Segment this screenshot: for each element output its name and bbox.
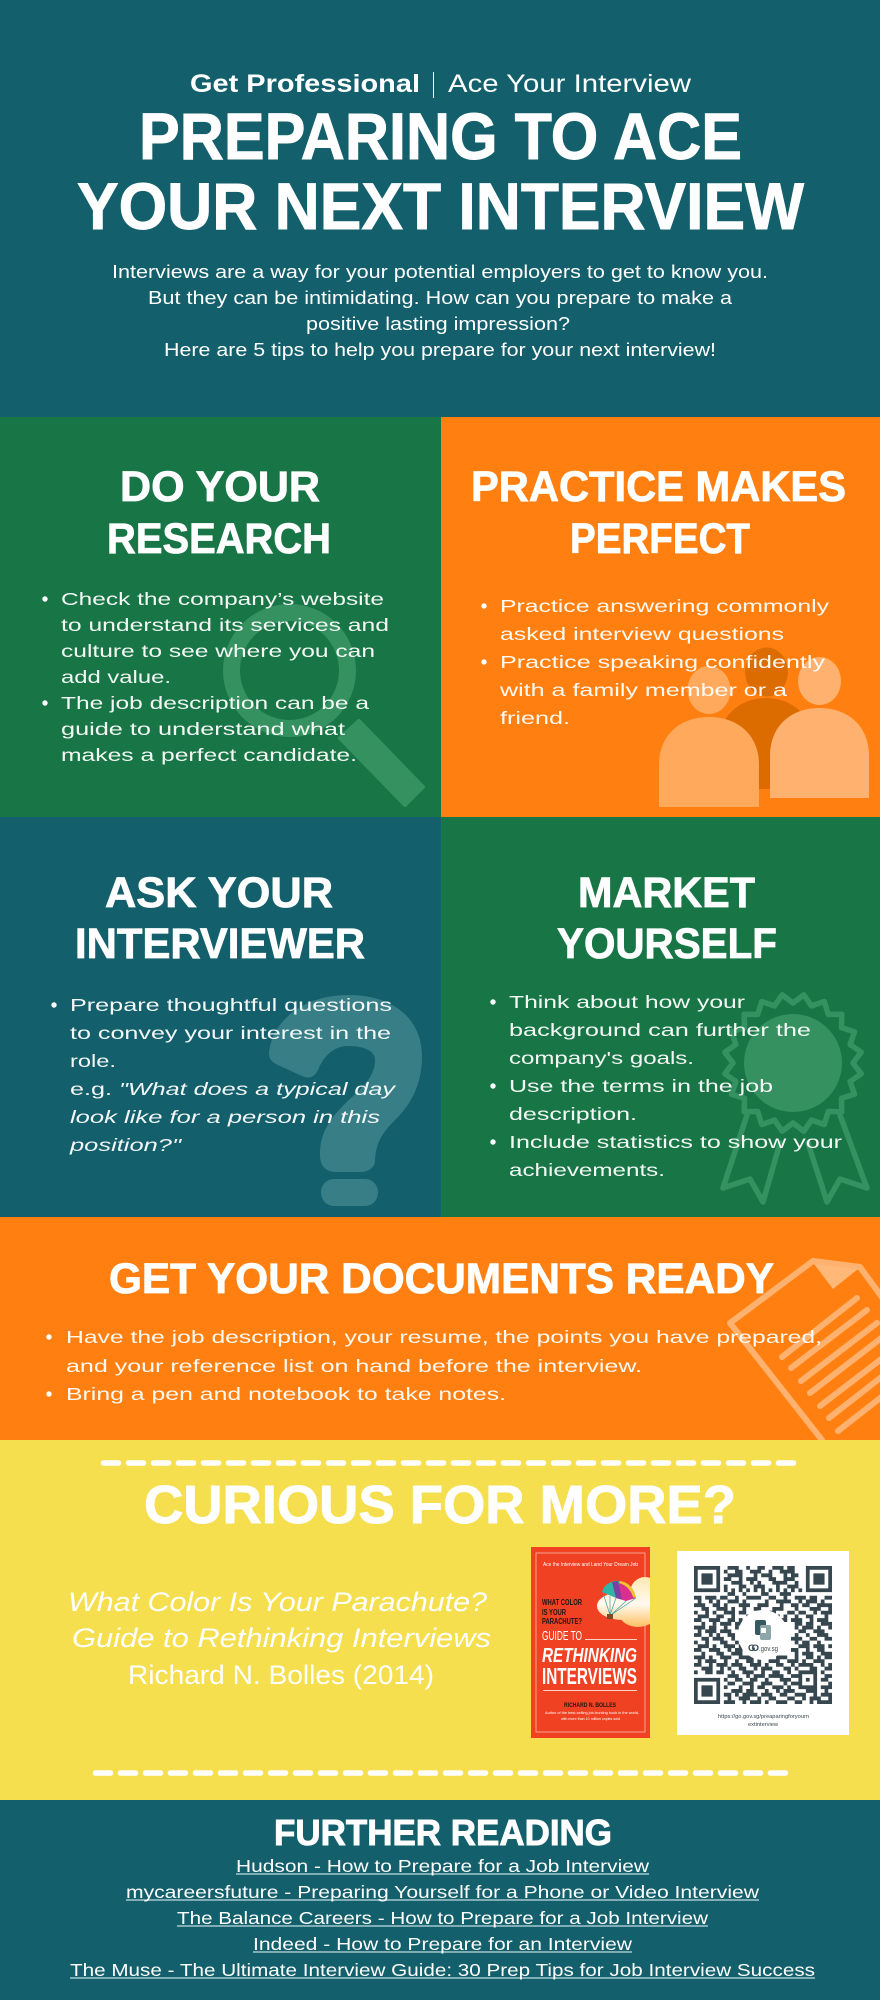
book cover: PARACHUTE? bbox=[542, 1617, 582, 1626]
icon: three people bbox=[659, 648, 869, 807]
heading: CURIOUS FOR MORE? bbox=[144, 1475, 736, 1535]
dashed divider top bbox=[104, 1460, 796, 1466]
icon: magnifying glass bbox=[232, 612, 423, 805]
book cover: INTERVIEWS bbox=[542, 1663, 637, 1689]
dashed divider bottom bbox=[96, 1770, 787, 1776]
subtitle bbox=[190, 70, 692, 98]
heading bbox=[471, 463, 846, 563]
bullet list: Practice speaking confidently bbox=[500, 652, 825, 672]
bullet list bbox=[46, 1327, 822, 1404]
book citation: What Color Is Your Parachute? bbox=[68, 1587, 487, 1617]
heading: INTERVIEWER bbox=[75, 920, 365, 968]
book cover: with more than 10 million copies sold bbox=[561, 1717, 620, 1721]
bullet list: with a family member or a bbox=[499, 680, 787, 700]
bullet list: Bring a pen and notebook to take notes. bbox=[66, 1384, 506, 1404]
bullet list bbox=[51, 995, 397, 1155]
reading links bbox=[70, 1856, 815, 1980]
subtitle: Get Professional bbox=[190, 70, 420, 98]
reading links: The Muse - The Ultimate Interview Guide: 30 Prep Tips for Job Interview Success bbox=[70, 1960, 815, 1980]
book cover: Author of the best-selling job-hunting book in the world, bbox=[545, 1711, 639, 1715]
bullet list: Practice answering commonly bbox=[500, 596, 829, 616]
intro text bbox=[112, 262, 768, 360]
heading: DO YOUR bbox=[120, 463, 320, 511]
QR logo: .gov.sg bbox=[759, 1646, 778, 1653]
book cover: GUIDE TO bbox=[542, 1628, 582, 1643]
QR logo bbox=[738, 1610, 788, 1660]
bullet list: guide to understand what bbox=[61, 719, 345, 739]
icon: document bbox=[730, 1261, 880, 1440]
reading links: Hudson - How to Prepare for a Job Interview bbox=[236, 1856, 649, 1876]
book citation: Guide to Rethinking Interviews bbox=[72, 1623, 491, 1653]
bullet list: to convey your interest in the bbox=[70, 1023, 391, 1043]
book citation: Richard N. Bolles (2014) bbox=[128, 1660, 434, 1690]
heading bbox=[75, 869, 365, 968]
heading bbox=[107, 463, 331, 563]
heading: YOURSELF bbox=[557, 920, 777, 968]
intro text: But they can be intimidating. How can you prepare to make a bbox=[148, 288, 733, 308]
bullet list: Prepare thoughtful questions bbox=[70, 995, 392, 1015]
QR logo: GO bbox=[748, 1643, 759, 1654]
bullet list: company's goals. bbox=[509, 1048, 694, 1068]
panel: further reading bbox=[0, 1800, 880, 2000]
heading bbox=[557, 869, 777, 968]
bullet list: makes a perfect candidate. bbox=[61, 745, 357, 765]
bullet list: description. bbox=[509, 1104, 637, 1124]
book cover: RICHARD N. BOLLES bbox=[564, 1702, 617, 1709]
bullet list: friend. bbox=[500, 708, 570, 728]
panel: market yourself bbox=[441, 817, 880, 1217]
title: PREPARING TO ACE bbox=[139, 99, 742, 173]
bullet list bbox=[481, 596, 829, 728]
QR url: extinterview bbox=[748, 1722, 778, 1728]
bullet list: culture to see where you can bbox=[61, 641, 375, 661]
panel: get your documents ready bbox=[0, 1217, 880, 1440]
panel: practice makes perfect bbox=[441, 417, 880, 817]
book cover: Ace the Interview and Land Your Dream Job bbox=[543, 1562, 638, 1568]
bullet list: achievements. bbox=[509, 1160, 665, 1180]
heading: PERFECT bbox=[570, 515, 750, 563]
bullet list: Use the terms in the job bbox=[509, 1076, 773, 1096]
QR url: https://go.gov.sg/preaparingforyourn bbox=[718, 1714, 809, 1720]
bullet list: and your reference list on hand before the interview. bbox=[66, 1356, 642, 1376]
book cover bbox=[531, 1547, 660, 1738]
panel: header bbox=[0, 0, 880, 417]
panel: ask your interviewer bbox=[0, 817, 441, 1217]
heading: PRACTICE MAKES bbox=[471, 463, 846, 511]
panel: curious for more bbox=[0, 1440, 880, 1800]
QR code modules bbox=[694, 1568, 832, 1702]
bullet list: to understand its services and bbox=[61, 615, 389, 635]
bullet list: asked interview questions bbox=[500, 624, 784, 644]
reading links: The Balance Careers - How to Prepare for a Job Interview bbox=[177, 1908, 708, 1928]
icon: question mark bbox=[269, 995, 422, 1206]
bullet list: The job description can be a bbox=[61, 693, 369, 713]
bullet list: Have the job description, your resume, the points you have prepared, bbox=[66, 1327, 822, 1347]
title bbox=[77, 99, 805, 243]
bullet list: add value. bbox=[61, 667, 171, 687]
title: YOUR NEXT INTERVIEW bbox=[77, 169, 805, 243]
bullet list: Include statistics to show your bbox=[509, 1132, 842, 1152]
heading: RESEARCH bbox=[107, 515, 331, 563]
bullet list: background can further the bbox=[509, 1020, 811, 1040]
bullet list: Check the company’s website bbox=[61, 589, 384, 609]
book cover: WHAT COLOR bbox=[542, 1598, 582, 1607]
bullet list: Think about how your bbox=[509, 992, 745, 1012]
icon: award rosette bbox=[723, 995, 867, 1202]
panel: do your research bbox=[0, 417, 441, 817]
bullet list: e.g. "What does a typical day bbox=[70, 1079, 397, 1099]
reading links: mycareersfuture - Preparing Yourself for a Phone or Video Interview bbox=[126, 1882, 759, 1902]
QR code card bbox=[677, 1551, 849, 1735]
heading: GET YOUR DOCUMENTS READY bbox=[109, 1255, 774, 1303]
heading: FURTHER READING bbox=[274, 1812, 612, 1853]
book cover: RETHINKING bbox=[542, 1645, 637, 1667]
bullet list: look like for a person in this bbox=[70, 1107, 380, 1127]
intro text: Here are 5 tips to help you prepare for your next interview! bbox=[164, 340, 716, 360]
bullet list: position?" bbox=[69, 1135, 182, 1155]
intro text: Interviews are a way for your potential employers to get to know you. bbox=[112, 262, 768, 282]
bullet list bbox=[42, 589, 389, 765]
book cover: IS YOUR bbox=[542, 1608, 566, 1617]
intro text: positive lasting impression? bbox=[306, 314, 570, 334]
heading: MARKET bbox=[578, 869, 755, 917]
bullet list bbox=[490, 992, 842, 1180]
reading links: Indeed - How to Prepare for an Interview bbox=[253, 1934, 632, 1954]
bullet list: role. bbox=[70, 1051, 116, 1071]
heading: ASK YOUR bbox=[105, 869, 333, 917]
book illustration: cloud and parachute bbox=[597, 1577, 650, 1627]
subtitle: Ace Your Interview bbox=[448, 70, 692, 98]
QR url bbox=[718, 1714, 809, 1728]
book citation bbox=[68, 1587, 491, 1690]
